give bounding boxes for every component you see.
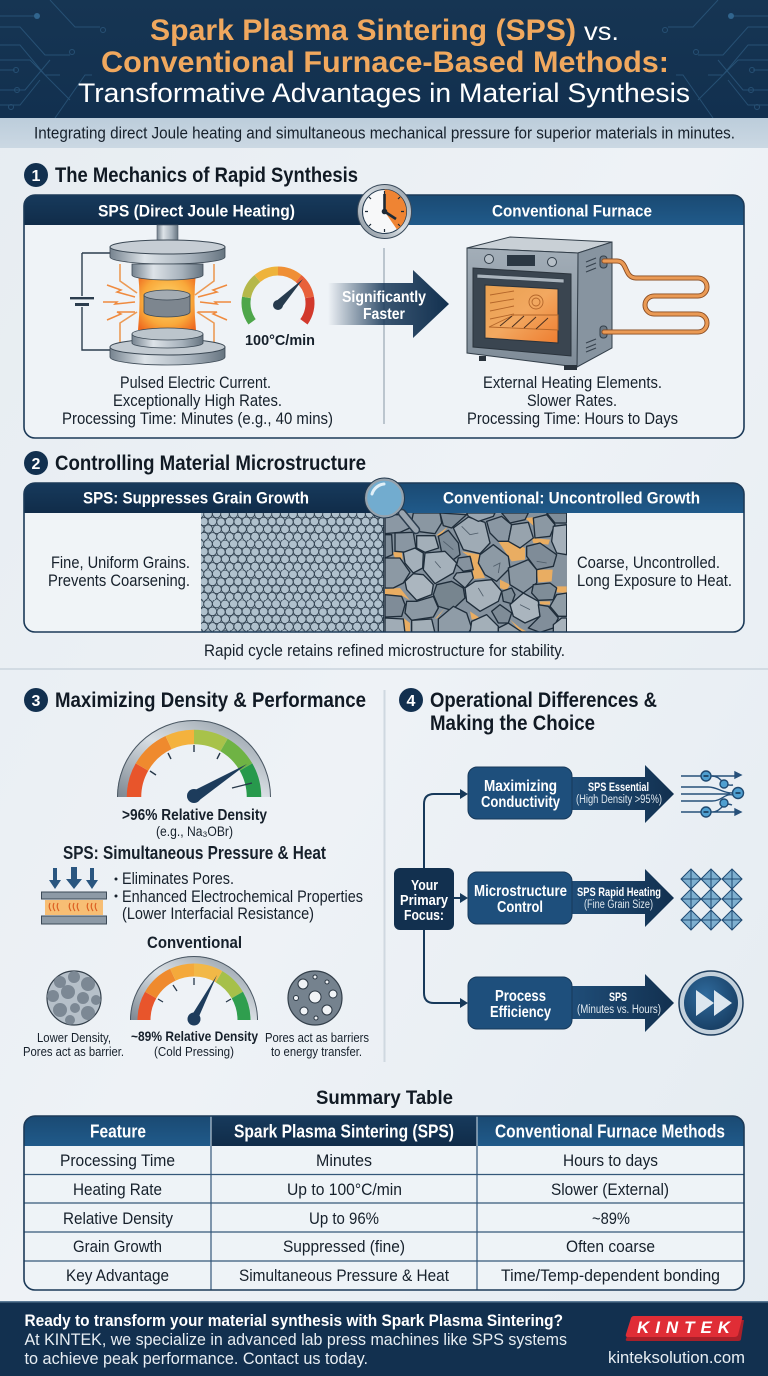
call to action: Ready to transform your material synthesis with Spark Plasma Sintering?	[24, 1311, 563, 1330]
website: kinteksolution.com	[608, 1348, 745, 1367]
table header	[90, 1122, 725, 1142]
logo: KINTEK: KINTEK	[637, 1318, 732, 1337]
section 4 heading: Making the Choice	[430, 712, 595, 735]
title: Transformative Advantages in Material Synthesis	[78, 78, 690, 108]
table header: Feature	[90, 1122, 146, 1142]
text: conventional captions: Pores act as barrier.	[23, 1044, 124, 1059]
section 4 heading: 4	[407, 693, 416, 710]
text: microstructure note: Rapid cycle retains refined microstructure for stability.	[204, 642, 565, 660]
table rows: Minutes	[316, 1151, 372, 1170]
heading: SPS: SPS (Direct Joule Heating)	[98, 202, 295, 220]
text: conventional captions: Lower Density,	[37, 1030, 111, 1045]
row: microstructure control: SPS Rapid Heating	[577, 887, 661, 899]
summary table	[24, 1116, 744, 1290]
table rows: Suppressed (fine)	[283, 1237, 405, 1256]
icon: ion flow	[681, 771, 744, 817]
table header: Conventional Furnace Methods	[495, 1122, 725, 1142]
text: conventional description: Processing Time: Hours to Days	[467, 410, 678, 428]
section 1 heading: The Mechanics of Rapid Synthesis	[55, 164, 358, 187]
arrow: significantly faster: Faster	[363, 306, 405, 323]
text: SPS description: Pulsed Electric Current.	[120, 374, 271, 392]
row: maximizing conductivity: Maximizing	[484, 778, 557, 795]
panel: microstructure comparison	[24, 478, 744, 633]
icon: SPS press	[70, 225, 231, 365]
table rows	[60, 1151, 720, 1285]
section 4 heading	[399, 688, 657, 735]
section 3 heading: Maximizing Density & Performance	[55, 689, 366, 712]
row: maximizing conductivity: (High Density >95%)	[576, 794, 662, 806]
gauge: conventional density	[130, 956, 258, 1026]
text: SPS description: Exceptionally High Rates.	[113, 392, 282, 410]
title: Conventional Furnace-Based Methods:	[101, 46, 669, 79]
section 4 heading: Operational Differences &	[430, 689, 657, 712]
icon: clock	[358, 184, 412, 238]
table rows: Simultaneous Pressure & Heat	[239, 1266, 449, 1285]
call to action: to achieve peak performance. Contact us today.	[24, 1349, 368, 1368]
table rows: Processing Time	[60, 1151, 175, 1170]
text: SPS benefits: Eliminates Pores.	[122, 870, 234, 888]
subtitle band	[0, 118, 768, 148]
arrow: significantly faster	[328, 270, 449, 338]
title: vs.	[584, 18, 619, 46]
row: process efficiency	[468, 974, 674, 1032]
heading: conventional growth: Conventional: Uncontrolled Growth	[443, 488, 700, 508]
title: Spark Plasma Sintering (SPS)	[150, 14, 576, 47]
icon: pressure and heat	[42, 867, 106, 924]
text: conventional captions: to energy transfer.	[271, 1044, 362, 1059]
circuit pattern: left	[0, 0, 106, 118]
text: coarse grains: Long Exposure to Heat.	[577, 572, 732, 590]
row: process efficiency: Efficiency	[490, 1004, 551, 1021]
row: microstructure control: Control	[497, 899, 543, 916]
table rows: Key Advantage	[66, 1266, 169, 1285]
text: SPS density value: (e.g., Na₃OBr)	[156, 823, 233, 839]
row: maximizing conductivity: Conductivity	[481, 794, 560, 811]
text: fine grains: Fine, Uniform Grains.	[51, 554, 190, 572]
text: SPS benefits	[114, 870, 363, 923]
icon: heating coil	[604, 261, 707, 332]
table rows: ~89%	[592, 1209, 630, 1228]
image: coarse grains	[385, 513, 567, 633]
text: conventional captions: (Cold Pressing)	[154, 1044, 234, 1059]
text: coarse grains: Coarse, Uncontrolled.	[577, 554, 720, 572]
text: conventional captions: Pores act as barriers	[265, 1030, 369, 1045]
box: your primary focus: Your	[411, 877, 438, 894]
gauge: heating rate	[245, 271, 315, 349]
text: SPS description: Processing Time: Minutes (e.g., 40 mins)	[62, 410, 333, 428]
text: SPS density value: >96% Relative Density	[122, 807, 267, 824]
text: SPS benefits: (Lower Interfacial Resistance)	[122, 905, 314, 923]
section 3 heading: 3	[32, 693, 41, 710]
text: SPS density value	[122, 807, 267, 839]
text: coarse grains	[577, 554, 732, 590]
section 2 heading: 2	[32, 456, 41, 473]
table rows: Slower (External)	[551, 1180, 669, 1199]
row: microstructure control: (Fine Grain Size)	[584, 899, 653, 911]
table header: Spark Plasma Sintering (SPS)	[234, 1122, 454, 1142]
box: your primary focus: Focus:	[404, 907, 444, 924]
text: conventional description: External Heating Elements.	[483, 374, 662, 392]
heading: conventional: Conventional	[147, 933, 242, 952]
icon: magnifier	[364, 478, 416, 530]
image: fine grains	[201, 513, 384, 632]
heading: simultaneous pressure and heat: SPS: Simultaneous Pressure & Heat	[63, 843, 326, 863]
table rows: Grain Growth	[73, 1237, 162, 1256]
table rows: Heating Rate	[73, 1180, 162, 1199]
text: conventional captions	[23, 1028, 369, 1059]
footer	[0, 1301, 768, 1376]
text: conventional captions: ~89% Relative Density	[131, 1028, 258, 1044]
call to action: At KINTEK, we specialize in advanced lab press machines like SPS systems	[24, 1330, 567, 1349]
text: conventional description: Slower Rates.	[527, 392, 617, 410]
box: your primary focus: Primary	[400, 892, 449, 909]
divider	[383, 248, 385, 424]
text: conventional description	[467, 374, 678, 428]
table rows: Time/Temp-dependent bonding	[501, 1266, 720, 1285]
row: microstructure control: Microstructure	[474, 883, 567, 900]
row: process efficiency: (Minutes vs. Hours)	[577, 1004, 661, 1016]
header banner	[0, 0, 768, 118]
arrow: significantly faster: Significantly	[342, 289, 426, 306]
icon: crystal lattice	[681, 869, 742, 930]
call to action	[24, 1311, 567, 1368]
row: maximizing conductivity	[468, 765, 674, 823]
circuit pattern: right	[662, 0, 768, 118]
icon: fast forward	[679, 971, 743, 1035]
panel: mechanics comparison	[24, 184, 744, 438]
text: SPS description	[62, 374, 333, 428]
row: maximizing conductivity: SPS Essential	[588, 782, 649, 794]
table rows: Up to 100°C/min	[287, 1180, 402, 1199]
table rows: Up to 96%	[309, 1209, 379, 1228]
heading: summary table: Summary Table	[316, 1087, 453, 1109]
table rows: Hours to days	[563, 1151, 658, 1170]
row: process efficiency: SPS	[609, 992, 627, 1004]
box: your primary focus	[394, 868, 454, 930]
title	[78, 14, 690, 108]
icon: porous disc	[288, 971, 342, 1025]
text: SPS benefits: Enhanced Electrochemical Properties	[122, 888, 363, 906]
row: process efficiency: Process	[495, 988, 546, 1005]
logo: KINTEK	[626, 1316, 744, 1341]
heading: SPS grain growth: SPS: Suppresses Grain Growth	[83, 488, 309, 508]
flowchart: connectors	[424, 789, 468, 1008]
text: fine grains	[48, 554, 190, 590]
icon: oven	[467, 237, 612, 369]
gauge: SPS density	[118, 720, 270, 803]
row: microstructure control	[468, 869, 674, 927]
table rows: Relative Density	[63, 1209, 173, 1228]
gauge: heating rate: 100°C/min	[245, 332, 315, 349]
section 2 heading: Controlling Material Microstructure	[55, 452, 366, 475]
heading: conventional furnace: Conventional Furnace	[492, 202, 652, 220]
text: fine grains: Prevents Coarsening.	[48, 572, 190, 590]
table rows: Often coarse	[566, 1237, 655, 1256]
icon: lower density disc	[47, 971, 101, 1025]
section 1 heading: 1	[32, 168, 41, 185]
